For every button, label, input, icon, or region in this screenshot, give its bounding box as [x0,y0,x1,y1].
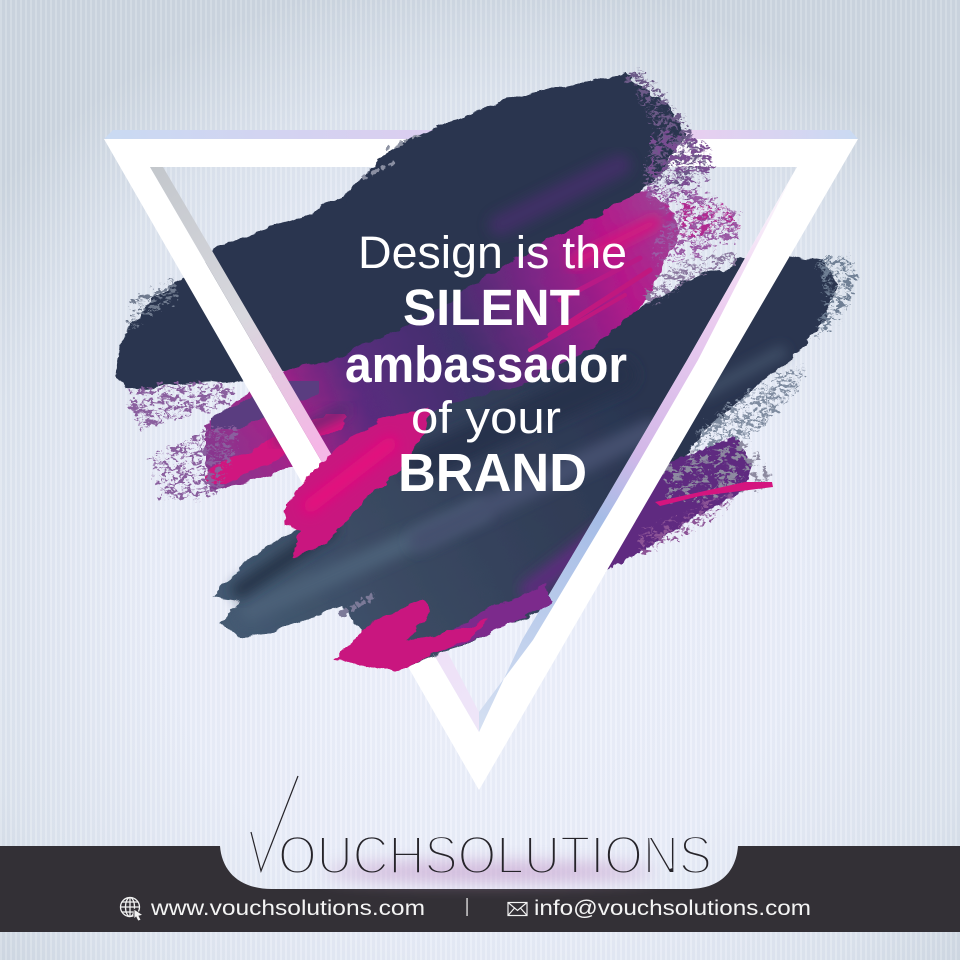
stroke: lighter slate tail on right stub [700,350,785,395]
stroke: grey speckles lower right [640,440,772,558]
triangle white body [104,139,858,790]
website: www.vouchsolutions.com [150,896,425,920]
icon: envelope [508,902,527,916]
email: info@vouchsolutions.com [534,896,811,920]
logo mark: check-shaped V [251,776,298,871]
footer bar [0,846,960,932]
stroke: purple on lower edge [440,585,552,652]
stroke: dab shading [305,440,395,510]
stroke: magenta streaks on left [215,385,345,478]
stroke: dark right stub [640,255,838,470]
headline line 3: ambassador [345,336,627,393]
stroke: bright magenta dab [285,408,428,558]
stroke: dark top over bar [345,74,685,350]
triangle right inner bevel [479,167,797,732]
paint stroke: back layer behind triangle [116,74,858,575]
stroke: speckled grey fringe on left blob [130,278,180,330]
triangle top bevel [104,130,858,139]
stroke: purple shading on top band [500,165,620,225]
stroke: grey fringe on top band left end [362,135,420,178]
triangle left inner bevel [150,167,479,732]
triangle frame [104,130,858,790]
stroke: speckled splatter on top right corner [625,68,740,308]
logo wordmark [282,837,708,872]
logo [250,776,708,873]
stroke: speckled tip of right stub [815,255,858,340]
stroke: speckled grey below right stub [690,362,805,450]
paint stroke: front layer over triangle [212,68,790,673]
stroke: magenta lower edge [332,600,490,673]
contact row [120,896,811,921]
logo glow [325,863,655,881]
stroke: streaks in lower band [240,375,650,612]
stroke: dark left and top band [116,74,685,390]
headline [345,227,627,503]
headline line 1: Design is the [358,227,627,278]
stroke: speckled dry-brush on left end [125,382,240,500]
icon: globe with cursor [120,898,143,921]
stroke: purple and magenta lower right [590,436,752,575]
stroke: magenta tip lower right [655,482,773,506]
headline line 2: SILENT [403,279,580,336]
headline line 5: BRAND [398,443,587,503]
separator [466,898,468,916]
stroke: grey fringe on lower edge [340,595,375,615]
stroke: magenta fibres on upper right [530,222,655,350]
stroke: lilac flecks on splatter [650,130,738,235]
headline line 4: of your [411,392,561,443]
stroke: dark lower band [212,266,741,668]
stroke: purple and magenta band [205,190,680,490]
